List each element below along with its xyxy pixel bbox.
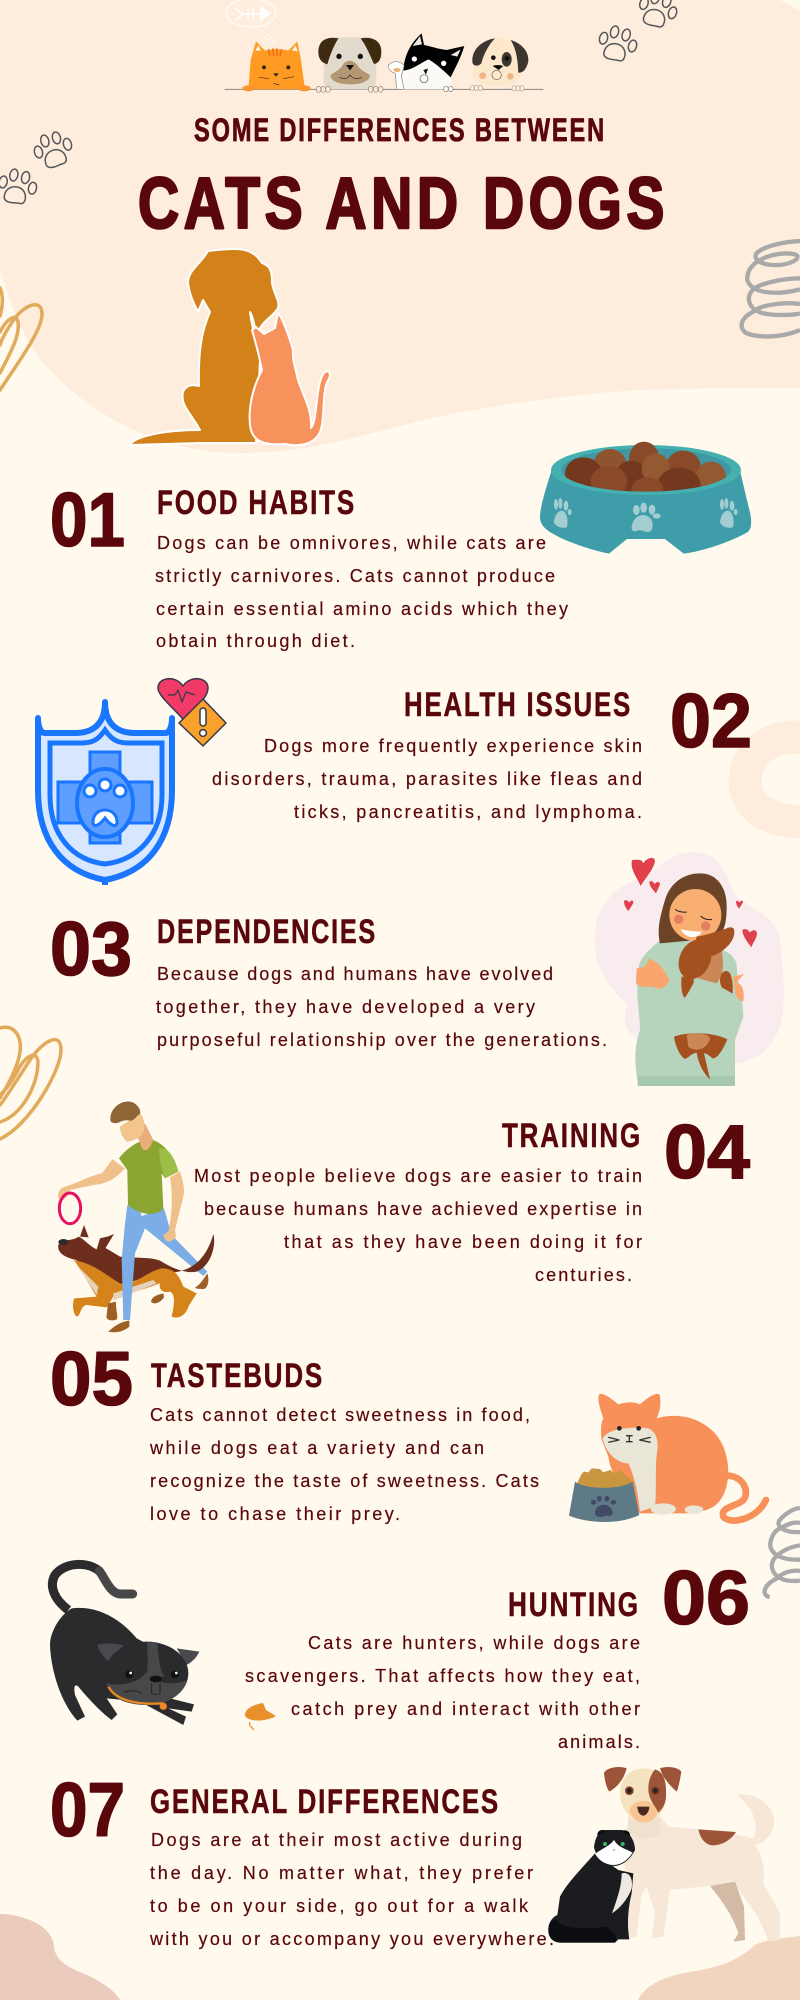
section 02: health issues (38, 679, 752, 885)
body text: Dogs can be omnivores, while cats are (157, 533, 546, 553)
body text (149, 1830, 554, 1949)
icon: heart and warning (158, 679, 226, 746)
body text: to be on your side, go out for a walk (150, 1896, 529, 1916)
body text (245, 1633, 640, 1752)
body text: the day. No matter what, they prefer (150, 1863, 533, 1883)
body text: strictly carnivores. Cats cannot produce (155, 566, 555, 586)
dog silhouette (130, 249, 278, 445)
torso (119, 1140, 178, 1214)
illustration: four pets peeking (225, 33, 543, 92)
body text: love to chase their prey. (150, 1504, 400, 1524)
pug dog (316, 37, 383, 92)
ledge line (225, 88, 543, 91)
decoration: grey spiral top right (742, 241, 800, 336)
body text: Dogs are at their most active during (151, 1830, 522, 1850)
body text (194, 1166, 642, 1285)
decoration: grey spiral bottom right (765, 1508, 800, 1597)
heading: HEALTH ISSUES (404, 686, 632, 724)
body text: catch prey and interact with other (291, 1699, 640, 1719)
body text: with you or accompany you everywhere. (149, 1929, 554, 1949)
body text: centuries. (535, 1265, 632, 1285)
body text (156, 964, 607, 1050)
icon: orange mouse (245, 1703, 276, 1730)
orange cat (242, 35, 311, 91)
body text (212, 736, 642, 822)
number 06: 06 (662, 1556, 750, 1641)
section 07: general differences (50, 1767, 780, 1949)
heading: HUNTING (508, 1586, 640, 1624)
ring (59, 1193, 81, 1224)
number 04: 04 (664, 1110, 750, 1195)
icon: paw print left lower (0, 166, 40, 207)
body text: animals. (558, 1732, 640, 1752)
number 05: 05 (50, 1337, 133, 1422)
decoration: gold scribble middle (0, 1027, 61, 1139)
body text: while dogs eat a variety and can (149, 1438, 484, 1458)
cat silhouette (250, 313, 330, 445)
body text: Because dogs and humans have evolved (157, 964, 553, 984)
body text: Most people believe dogs are easier to train (194, 1166, 642, 1186)
heading: TRAINING (502, 1117, 642, 1155)
icon: food bowl (540, 442, 751, 554)
illustration: crouching black cat (50, 1564, 199, 1725)
heading: FOOD HABITS (157, 484, 356, 522)
body text: because humans have achieved expertise in (204, 1199, 642, 1219)
number 03: 03 (50, 907, 132, 992)
illustration: woman hugging dog (595, 852, 784, 1086)
dog (625, 1794, 780, 1942)
body text: disorders, trauma, parasites like fleas and (212, 769, 642, 789)
body text: that as they have been doing it for (284, 1232, 642, 1252)
body text: certain essential amino acids which they (156, 599, 568, 619)
number 02: 02 (670, 679, 752, 764)
heading: DEPENDENCIES (157, 913, 377, 951)
spotted dog (470, 37, 528, 91)
icon: paw print left upper (31, 129, 76, 171)
heading: GENERAL DIFFERENCES (150, 1783, 500, 1821)
section 06: hunting (50, 1556, 750, 1752)
icon: paw print upper (595, 23, 640, 65)
title line one: SOME DIFFERENCES BETWEEN (194, 112, 606, 148)
body text: purposeful relationship over the generations. (157, 1030, 607, 1050)
front leg (122, 1205, 145, 1320)
number 07: 07 (50, 1768, 125, 1853)
icon: paw print top right (634, 0, 681, 32)
section 03: dependencies (50, 852, 784, 1086)
section 01: food habits (50, 442, 751, 651)
body text: scavengers. That affects how they eat, (245, 1666, 640, 1686)
main title: CATS AND DOGS (138, 164, 669, 244)
number 01: 01 (50, 478, 125, 563)
body text (155, 533, 568, 651)
body text: Cats cannot detect sweetness in food, (150, 1405, 530, 1425)
illustration: dog and cat silhouettes (130, 249, 330, 445)
black and white cat (388, 33, 464, 92)
body text: recognize the taste of sweetness. Cats (150, 1471, 539, 1491)
body text: Cats are hunters, while dogs are (308, 1633, 640, 1653)
body text: ticks, pancreatitis, and lymphoma. (294, 802, 642, 822)
arms and head (58, 1159, 184, 1241)
body text (149, 1405, 539, 1524)
dog (58, 1234, 214, 1285)
body text: Dogs more frequently experience skin (264, 736, 642, 756)
icon: fish bone (226, 0, 276, 27)
decoration: gold scribble top (0, 288, 42, 390)
body text: together, they have developed a very (156, 997, 535, 1017)
illustration: man and dog with ring (58, 1101, 214, 1332)
back leg and shoe (140, 1208, 208, 1289)
illustration: dog and black cat (548, 1767, 780, 1943)
section 04: training (58, 1101, 750, 1332)
section 05: tastebuds (50, 1337, 766, 1524)
cat (548, 1853, 633, 1943)
illustration: orange cat with bowl (569, 1394, 766, 1522)
heading: TASTEBUDS (151, 1357, 324, 1395)
icon: paw health shield (38, 702, 172, 885)
body text: obtain through diet. (156, 631, 355, 651)
